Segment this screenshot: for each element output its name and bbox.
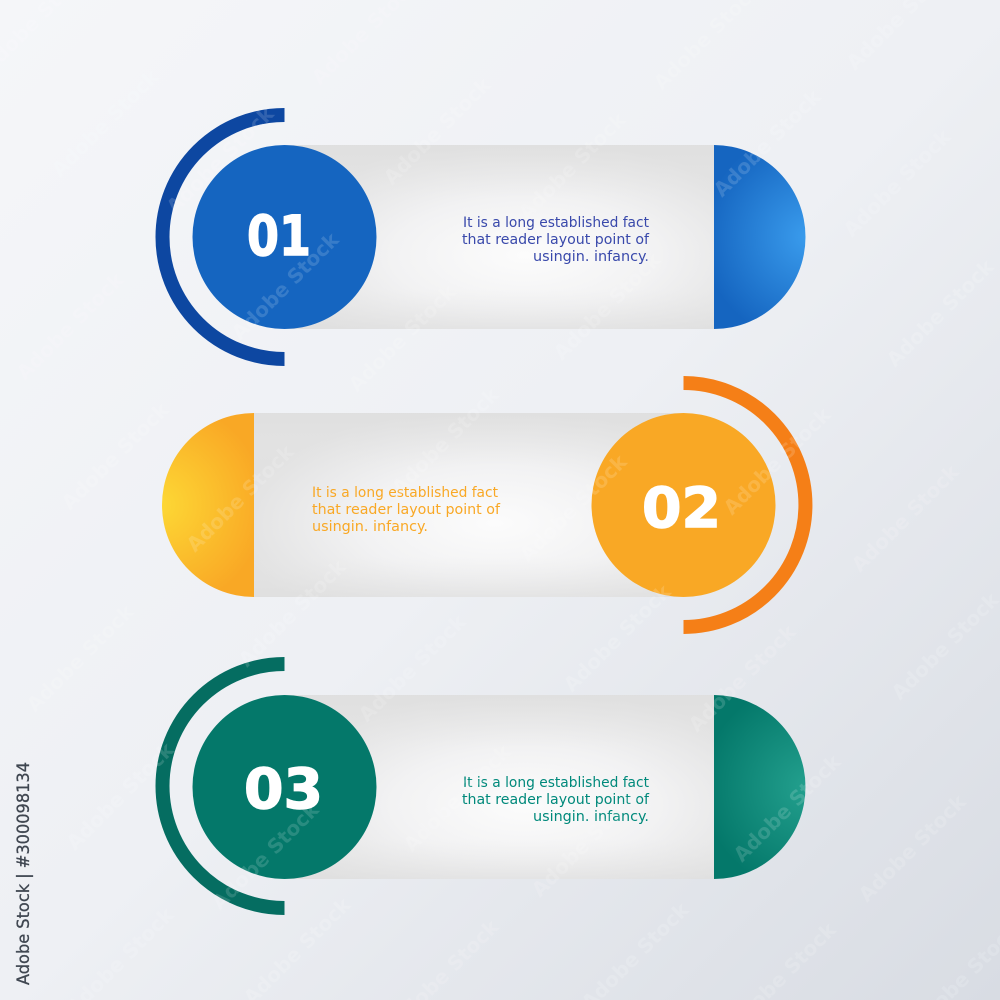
description 01: that reader layout point of <box>462 232 650 248</box>
orange number circle <box>592 413 776 597</box>
blue half circle cap <box>714 145 805 329</box>
green number circle <box>192 695 376 879</box>
stock id label: Adobe Stock | #300098134 <box>14 762 33 985</box>
watermark pattern: Adobe Stock <box>47 64 164 181</box>
description 03 <box>462 775 650 825</box>
description 02 <box>312 485 501 535</box>
watermark pattern: Adobe Stock <box>354 609 471 726</box>
number 03: 03 <box>244 757 323 821</box>
watermark pattern: Adobe Stock <box>207 797 324 914</box>
description 03: It is a long established fact <box>463 775 649 791</box>
description 01: usingin. infancy. <box>533 249 649 265</box>
watermark pattern: Adobe Stock <box>719 402 836 519</box>
blue number circle <box>192 145 376 329</box>
yellow half circle cap <box>162 413 254 597</box>
green outer arc <box>162 664 284 908</box>
watermark pattern: Adobe Stock <box>887 587 1000 704</box>
watermark pattern: Adobe Stock <box>62 737 179 854</box>
watermark pattern: Adobe Stock <box>882 254 999 371</box>
panel: step 03 <box>162 664 805 908</box>
description 01 <box>462 215 650 265</box>
panel body 02 <box>254 413 684 597</box>
watermark pattern: Adobe Stock <box>729 749 846 866</box>
watermark pattern: Adobe Stock <box>234 554 351 671</box>
watermark pattern: Adobe Stock <box>854 789 971 906</box>
number 02: 02 <box>642 476 721 540</box>
watermark pattern: Adobe Stock <box>709 84 826 201</box>
panel: step 02 <box>162 383 805 627</box>
watermark pattern: Adobe Stock <box>344 279 461 396</box>
description 01: It is a long established fact <box>463 215 649 231</box>
description 02: usingin. infancy. <box>312 519 428 535</box>
watermark pattern: Adobe Stock <box>379 72 496 189</box>
blue outer arc <box>162 115 284 359</box>
panel body 03 <box>284 695 714 879</box>
watermark pattern: Adobe Stock <box>12 267 129 384</box>
watermark pattern: Adobe Stock <box>847 459 964 576</box>
watermark pattern: Adobe Stock <box>527 784 644 901</box>
watermark pattern: Adobe Stock <box>57 397 174 514</box>
watermark pattern: Adobe Stock <box>162 101 279 218</box>
green half circle cap <box>714 695 805 879</box>
watermark pattern: Adobe Stock <box>387 382 504 499</box>
watermark pattern: Adobe Stock <box>514 107 631 224</box>
description 03: usingin. infancy. <box>533 809 649 825</box>
number 01: 01 <box>247 204 311 268</box>
watermark pattern: Adobe Stock <box>182 439 299 556</box>
description 03: that reader layout point of <box>462 792 650 808</box>
panel body 01 <box>284 145 714 329</box>
watermark pattern: Adobe Stock <box>227 227 344 344</box>
watermark pattern: Adobe Stock <box>515 449 632 566</box>
watermark pattern: Adobe Stock <box>684 619 801 736</box>
watermark pattern: Adobe Stock <box>559 579 676 696</box>
panel: step 01 <box>162 115 805 359</box>
orange outer arc <box>684 383 805 627</box>
description 02: It is a long established fact <box>312 485 498 501</box>
watermark pattern: Adobe Stock <box>399 739 516 856</box>
watermark pattern: Adobe Stock <box>549 247 666 364</box>
watermark pattern: Adobe Stock <box>22 599 139 716</box>
description 02: that reader layout point of <box>312 502 501 518</box>
watermark pattern: Adobe Stock <box>839 124 956 241</box>
